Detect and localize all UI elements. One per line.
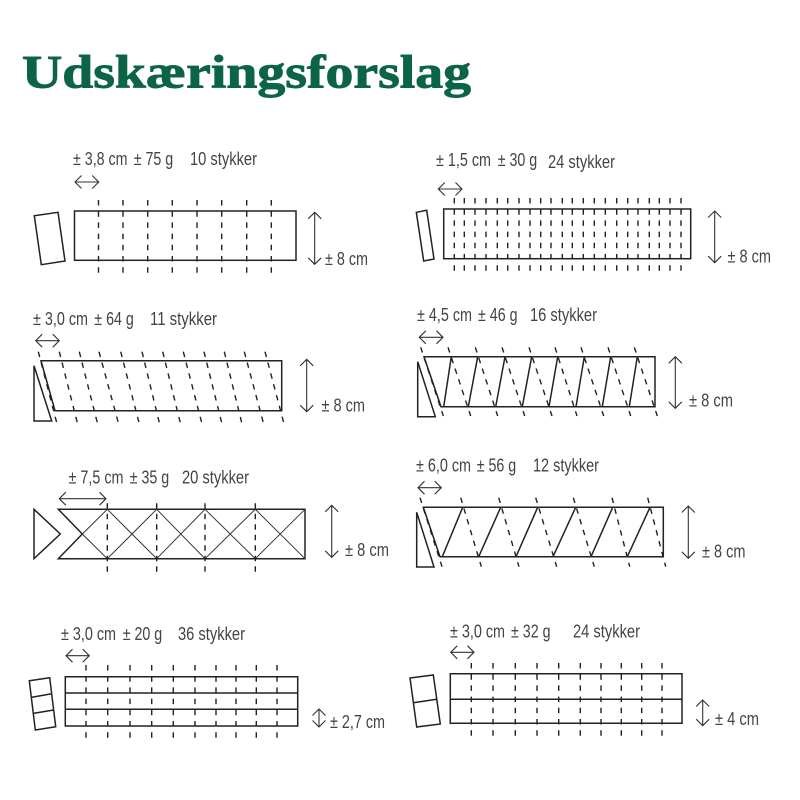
arrow: piece width [75,176,99,188]
dashed cut lines [421,347,657,416]
cut piece [34,509,60,559]
measurements text: ± 46 g [478,304,518,325]
cut lines [86,665,277,738]
measurements text [450,620,759,729]
measurements text: ± 8 cm [345,539,389,560]
arrow: piece width [59,492,106,505]
strip [74,211,296,260]
measurements text: ± 8 cm [728,246,771,267]
measurements text: ± 3,8 cm [73,148,128,169]
arrow: piece width [36,334,59,347]
cut piece [34,366,52,421]
cut piece [34,212,65,265]
measurements text [73,148,368,269]
measurements text [416,455,746,561]
cut lines [471,663,662,736]
strip [65,677,298,726]
strip [423,507,663,557]
arrow: strip height [669,357,682,408]
measurements text: 10 stykker [190,148,257,169]
panel: 24 pieces two rows [410,620,759,736]
cut lines [454,198,681,271]
measurements text: 24 stykker [548,151,615,172]
measurements text: 20 stykker [182,466,249,487]
panel: 11 pieces slanted cut [33,308,365,423]
measurements text: 24 stykker [573,620,640,641]
arrow: strip height [300,359,313,412]
cut lines [38,352,284,423]
measurements text [33,308,365,416]
arrow: strip height [312,709,326,727]
strip [444,209,691,259]
measurements text: ± 8 cm [689,390,733,411]
arrow: strip height [308,212,321,264]
measurements text [436,149,771,267]
cut piece [417,512,434,567]
arrow: piece width [419,331,443,344]
solid slanted cuts [444,357,637,407]
measurements text: ± 3,0 cm [33,308,88,329]
measurements text: ± 20 g [123,623,162,644]
panel: 10 pieces straight cut [34,148,368,273]
measurements text: ± 75 g [134,148,173,169]
cut piece [29,678,56,730]
measurements text: 11 stykker [150,308,217,329]
arrow: piece width [418,481,441,494]
arrow: strip height [708,211,721,263]
arrow: strip height [325,505,338,557]
measurements text: ± 56 g [477,455,516,476]
dashed cut lines [420,498,666,567]
arrow: strip height [682,506,695,558]
measurements text: 16 stykker [530,304,597,325]
dashed cut lines [107,503,255,572]
measurements text: 36 stykker [178,623,245,644]
panel: 24 pieces straight cut [416,149,771,271]
measurements text: ± 8 cm [702,540,746,561]
arrow: piece width [438,182,462,196]
measurements text: ± 4 cm [715,708,759,729]
strip [41,361,282,411]
measurements text: ± 30 g [498,149,537,170]
panel: 20 pieces diamond cut [34,466,389,572]
measurements text: ± 1,5 cm [436,149,491,170]
cut lines [98,200,271,273]
strip [450,674,682,723]
measurements text: ± 32 g [511,620,550,641]
cut piece [410,675,440,727]
panel: 36 pieces three rows [29,623,385,738]
measurements text: ± 4,5 cm [417,304,472,325]
measurements text: ± 8 cm [325,248,368,269]
panel: 12 pieces zigzag cut [416,455,746,567]
arrow: piece width [66,649,89,662]
arrow: piece width [451,646,474,659]
measurements text: ± 3,0 cm [450,620,505,641]
measurements text: ± 8 cm [322,395,365,416]
measurements text: ± 6,0 cm [416,455,471,476]
title: Udskæringsforslag [22,46,472,98]
measurements text [68,466,389,560]
measurements text: ± 3,0 cm [61,623,116,644]
arrow: strip height [696,700,709,726]
cut piece [416,210,434,261]
measurements text: ± 7,5 cm [68,466,124,487]
solid slanted cuts [442,507,650,557]
diagonal cuts [82,509,305,559]
measurements text [417,304,733,411]
measurements text: ± 35 g [130,466,169,487]
measurements text [61,623,385,732]
measurements text: ± 64 g [94,308,134,329]
panel: 16 pieces zigzag cut [417,304,733,417]
measurements text: 12 stykker [533,455,599,476]
strip [424,357,655,407]
measurements text: ± 2,7 cm [330,711,385,732]
strip [58,509,305,559]
cut piece [418,362,435,417]
